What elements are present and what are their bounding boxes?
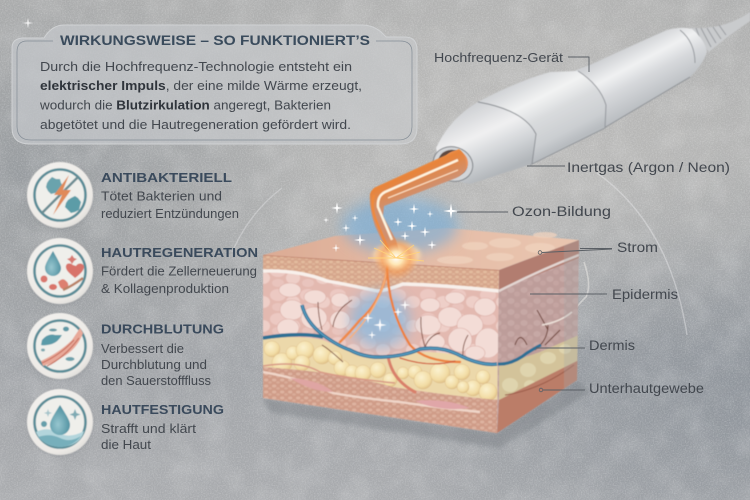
spark glow xyxy=(342,198,458,267)
text block xyxy=(39,59,362,132)
benefit: Antibakteriell: reduziert Entzündungen xyxy=(101,207,239,221)
label: Dermis: Dermis xyxy=(589,338,635,353)
nozzle xyxy=(429,142,477,186)
ribbed cable xyxy=(690,12,750,52)
label: Unterhautgewebe: Unterhautgewebe xyxy=(589,381,704,396)
benefit: Durchblutung: Verbessert die xyxy=(101,342,184,356)
label: Strom: Strom xyxy=(617,240,658,255)
benefit: Antibakteriell: Tötet Bakterien und xyxy=(101,190,222,204)
label: Unterhautgewebe xyxy=(539,381,704,396)
benefit: Hautregeneration: & Kollagenproduktion xyxy=(101,282,229,296)
icon: antibakteriell xyxy=(27,162,93,229)
skin subcutis layer xyxy=(263,367,499,436)
skin epidermis band xyxy=(263,255,499,290)
icon: hautfestigung xyxy=(27,389,93,456)
benefit: Hautregeneration xyxy=(101,245,258,296)
skin block xyxy=(260,228,590,448)
benefit: Hautfestigung: HAUTFESTIGUNG xyxy=(101,402,224,417)
middle body xyxy=(478,71,606,165)
icon: durchblutung xyxy=(27,313,93,380)
brown capillaries xyxy=(318,300,468,362)
rear body xyxy=(555,28,707,145)
benefit: Durchblutung xyxy=(101,322,224,388)
benefit: Hautfestigung xyxy=(101,402,224,452)
glow in dermis xyxy=(350,292,410,348)
blue vessel xyxy=(263,305,497,364)
nose cone xyxy=(436,102,535,184)
device: Hochfrequenz-Gerät xyxy=(429,12,750,186)
label: Dermis xyxy=(536,338,635,353)
label: Ozon-Bildung: Ozon-Bildung xyxy=(512,204,611,219)
skin top surface xyxy=(263,228,579,270)
text block: Durch die Hochfrequenz-Technologie entsteht ein xyxy=(40,59,352,74)
text block: wodurch die Blutzirkulation angeregt, Bakterien xyxy=(39,98,331,112)
benefit: Durchblutung: DURCHBLUTUNG xyxy=(101,322,224,336)
text block: elektrischer Impuls , der eine milde Wärme erzeugt, xyxy=(40,78,362,93)
benefit: Durchblutung: Durchblutung und xyxy=(101,358,207,372)
benefit: Hautfestigung: Strafft und klärt xyxy=(101,422,197,436)
benefit: Hautfestigung: die Haut xyxy=(101,438,152,452)
benefit: Durchblutung: den Sauerstofffluss xyxy=(101,374,211,388)
orange current rays xyxy=(340,265,460,392)
skin front face xyxy=(260,250,505,440)
heading: WIRKUNGSWEISE – SO FUNKTIONIERT’S xyxy=(60,33,370,48)
skin right face xyxy=(496,240,580,433)
icon: hautregeneration xyxy=(27,238,93,305)
benefit: Antibakteriell xyxy=(101,170,239,221)
label: Inertgas: Inertgas (Argon / Neon) xyxy=(567,160,730,175)
panel: Wirkungsweise xyxy=(12,25,417,144)
benefit: Hautregeneration: HAUTREGENERATION xyxy=(101,245,258,260)
label: Epidermis: Epidermis xyxy=(612,287,678,302)
benefit: Hautregeneration: Fördert die Zellerneuerung xyxy=(101,264,257,278)
sparks xyxy=(323,202,459,280)
label: Strom xyxy=(538,240,658,255)
label: Hochfrequenz-Gerät: Hochfrequenz-Gerät xyxy=(434,50,563,65)
benefit: Antibakteriell: ANTIBAKTERIELL xyxy=(101,170,232,185)
plasma tube xyxy=(370,149,466,262)
label: Hochfrequenz-Gerät xyxy=(434,50,589,72)
skin fat layer xyxy=(263,337,499,400)
text block: abgetötet und die Hautregeneration gefördert wird. xyxy=(40,117,351,132)
